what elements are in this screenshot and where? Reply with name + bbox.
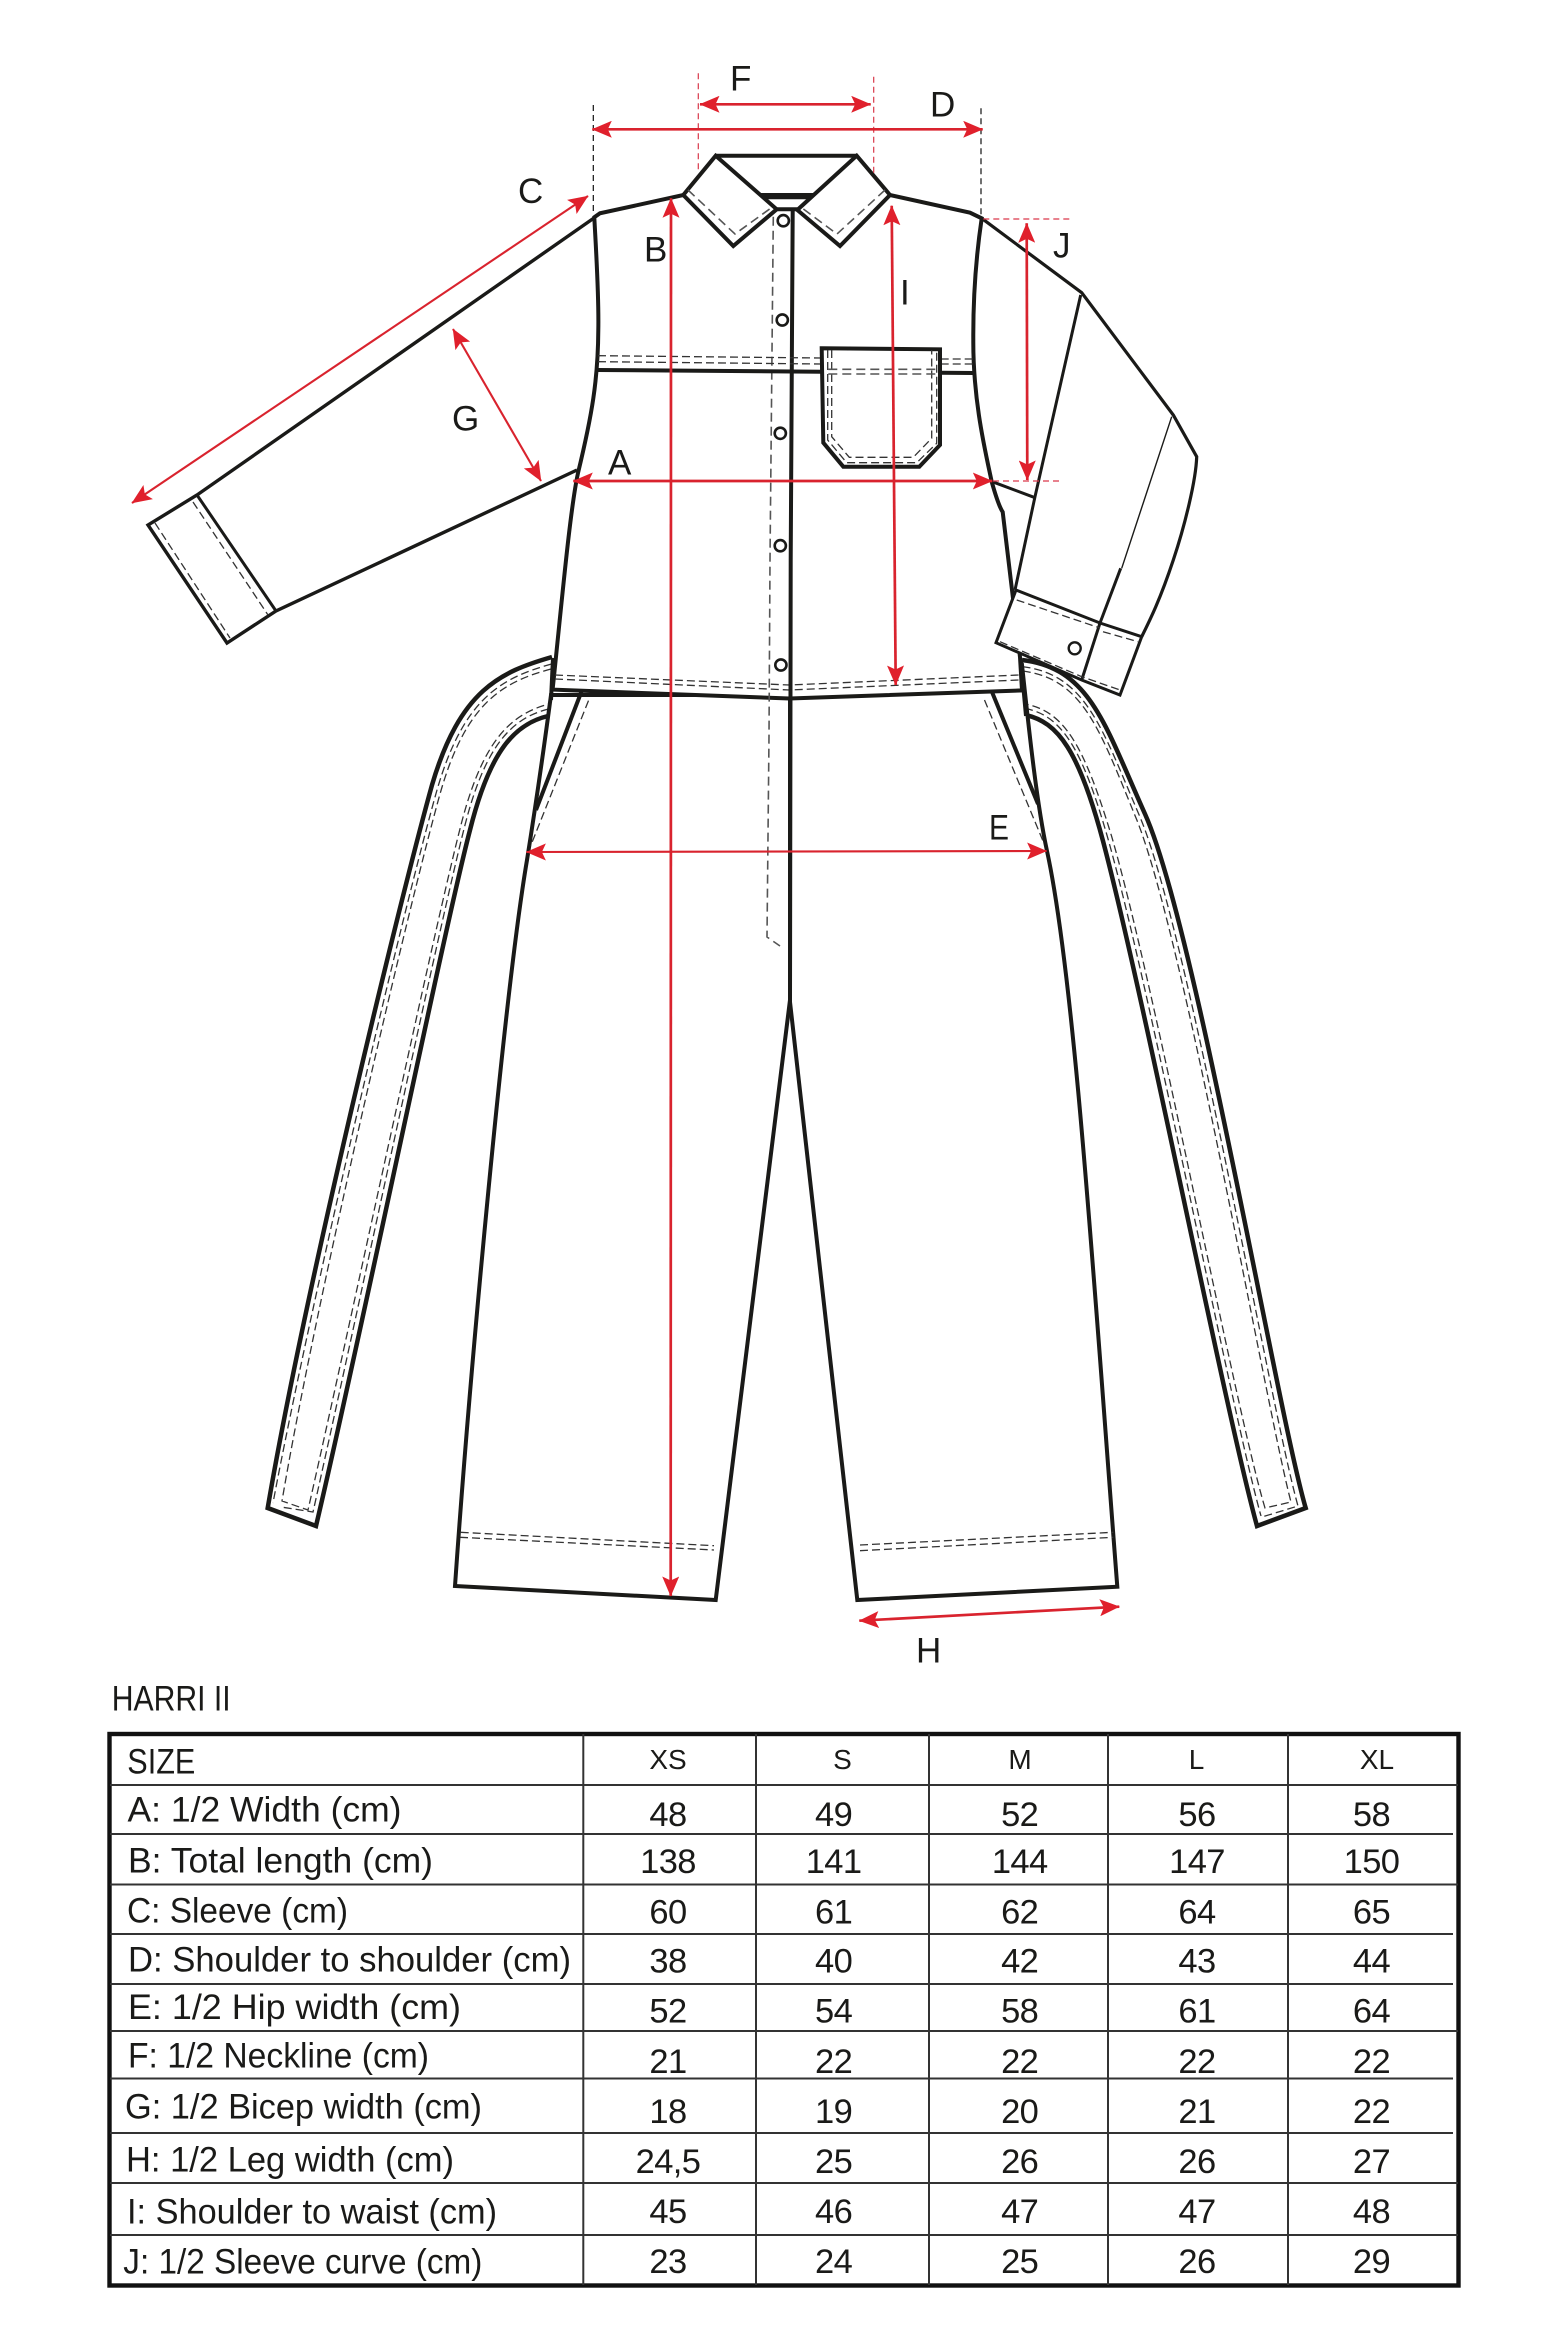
row A: A: 1/2 Width (cm) (128, 1791, 402, 1830)
row B: 144 (992, 1843, 1048, 1881)
row D: 44 (1353, 1942, 1390, 1980)
table grid (110, 1734, 1458, 2286)
header row: XS (649, 1744, 687, 1775)
row D: 38 (649, 1942, 687, 1980)
row A: 49 (815, 1796, 852, 1834)
arrow J: sleeve curve (1025, 223, 1029, 480)
row E: 58 (1001, 1992, 1038, 2030)
row H: 26 (1001, 2143, 1038, 2181)
header row: M (1008, 1744, 1032, 1775)
row D: 42 (1001, 1942, 1038, 1980)
measurement letters: J (1053, 226, 1070, 266)
row H: 24,5 (636, 2143, 700, 2181)
row A (128, 1791, 1390, 1834)
row A: 48 (649, 1796, 687, 1834)
row F: F: 1/2 Neckline (cm) (128, 2036, 429, 2075)
arrow A: half width (573, 480, 992, 482)
right trouser leg (790, 665, 1117, 1600)
row J: 25 (1001, 2243, 1038, 2281)
row B: 138 (640, 1843, 696, 1881)
right sleeve (982, 218, 1197, 695)
row G: 19 (815, 2093, 852, 2131)
header row (127, 1742, 1394, 1781)
measurement letters: H (916, 1631, 941, 1670)
row C: 65 (1353, 1894, 1390, 1932)
garment flat drawing: jumpsuit (148, 156, 1306, 1600)
measurement guides (593, 73, 1069, 481)
header row: SIZE (127, 1742, 195, 1781)
arrow H: leg width (859, 1607, 1119, 1621)
row E: 61 (1178, 1992, 1216, 2030)
measurement letters: A (608, 443, 632, 482)
arrow G: bicep width (453, 329, 541, 481)
row B: 150 (1344, 1843, 1399, 1881)
row A: 52 (1001, 1796, 1038, 1834)
row B: 147 (1169, 1843, 1225, 1881)
row F: 22 (1178, 2043, 1216, 2081)
row G: 18 (649, 2093, 687, 2131)
row E (128, 1988, 1390, 2030)
row E: 54 (815, 1992, 853, 2030)
left belt tie (268, 657, 552, 1526)
sleeve cuff (996, 590, 1142, 695)
row G: 21 (1178, 2093, 1216, 2131)
row H: 27 (1353, 2143, 1390, 2181)
row D: 43 (1178, 1942, 1216, 1980)
row I (127, 2192, 1390, 2231)
measurement letters (452, 60, 1070, 1670)
right belt tie (1022, 660, 1306, 1526)
row C (127, 1891, 1390, 1932)
arrow E: hip width (526, 851, 1047, 852)
arrow D: shoulder to shoulder (592, 128, 983, 131)
row F (128, 2036, 1390, 2081)
row B: B: Total length (cm) (128, 1841, 433, 1880)
measurement letters: F (730, 60, 751, 99)
row J: 26 (1178, 2243, 1216, 2281)
row J: 29 (1353, 2243, 1390, 2281)
jacket bodice (551, 195, 1026, 1000)
arrow F: neckline (700, 103, 871, 106)
row G (125, 2087, 1390, 2131)
row G: G: 1/2 Bicep width (cm) (125, 2087, 482, 2126)
measurement letters: C (518, 172, 543, 211)
row I: 48 (1353, 2193, 1390, 2231)
row C: C: Sleeve (cm) (127, 1891, 348, 1930)
row I: I: Shoulder to waist (cm) (127, 2192, 497, 2231)
row D: D: Shoulder to shoulder (cm) (128, 1941, 571, 1980)
row A: 56 (1178, 1796, 1216, 1834)
row B: 141 (806, 1843, 861, 1881)
row B (128, 1841, 1399, 1881)
row J: 24 (815, 2243, 853, 2281)
size table (110, 1734, 1458, 2286)
row D (128, 1941, 1390, 1980)
title: HARRI II (112, 1680, 231, 1719)
header row: S (833, 1744, 852, 1775)
arrow I: shoulder to waist (892, 206, 896, 685)
row J: J: 1/2 Sleeve curve (cm) (123, 2242, 482, 2281)
row C: 64 (1178, 1894, 1216, 1932)
row E: 52 (649, 1992, 687, 2030)
row I: 47 (1178, 2193, 1216, 2231)
left sleeve (148, 218, 594, 643)
row F: 22 (1353, 2043, 1390, 2081)
row E: E: 1/2 Hip width (cm) (128, 1988, 461, 2027)
row C: 62 (1001, 1894, 1038, 1932)
measurement letters: G (452, 400, 479, 439)
row A: 58 (1353, 1796, 1390, 1834)
row G: 20 (1001, 2093, 1038, 2131)
row C: 61 (815, 1894, 852, 1932)
header row: XL (1360, 1744, 1394, 1775)
arrow B: total length (669, 198, 672, 1596)
chest pocket (822, 348, 940, 467)
measurement letters: B (644, 231, 667, 270)
row F: 22 (815, 2043, 852, 2081)
header row: L (1189, 1744, 1204, 1775)
buttons (775, 215, 789, 671)
hip pockets (531, 692, 1043, 846)
row F: 21 (649, 2043, 687, 2081)
measurement letters: D (930, 86, 955, 124)
arrow C: sleeve (132, 196, 588, 503)
row G: 22 (1353, 2093, 1390, 2131)
row C: 60 (649, 1894, 687, 1932)
measurement letters: I (900, 273, 910, 312)
left trouser leg (455, 695, 790, 1600)
row H (126, 2141, 1390, 2181)
row J: 23 (649, 2243, 687, 2281)
measurement letters: E (989, 808, 1009, 848)
row H: 26 (1178, 2143, 1216, 2181)
collar (683, 156, 890, 246)
row D: 40 (815, 1942, 852, 1980)
row I: 46 (815, 2193, 852, 2231)
row H: 25 (815, 2143, 852, 2181)
row I: 47 (1001, 2193, 1038, 2231)
row H: H: 1/2 Leg width (cm) (126, 2141, 454, 2180)
row F: 22 (1001, 2043, 1038, 2081)
row I: 45 (649, 2193, 687, 2231)
row J (123, 2242, 1390, 2281)
row E: 64 (1353, 1992, 1390, 2030)
